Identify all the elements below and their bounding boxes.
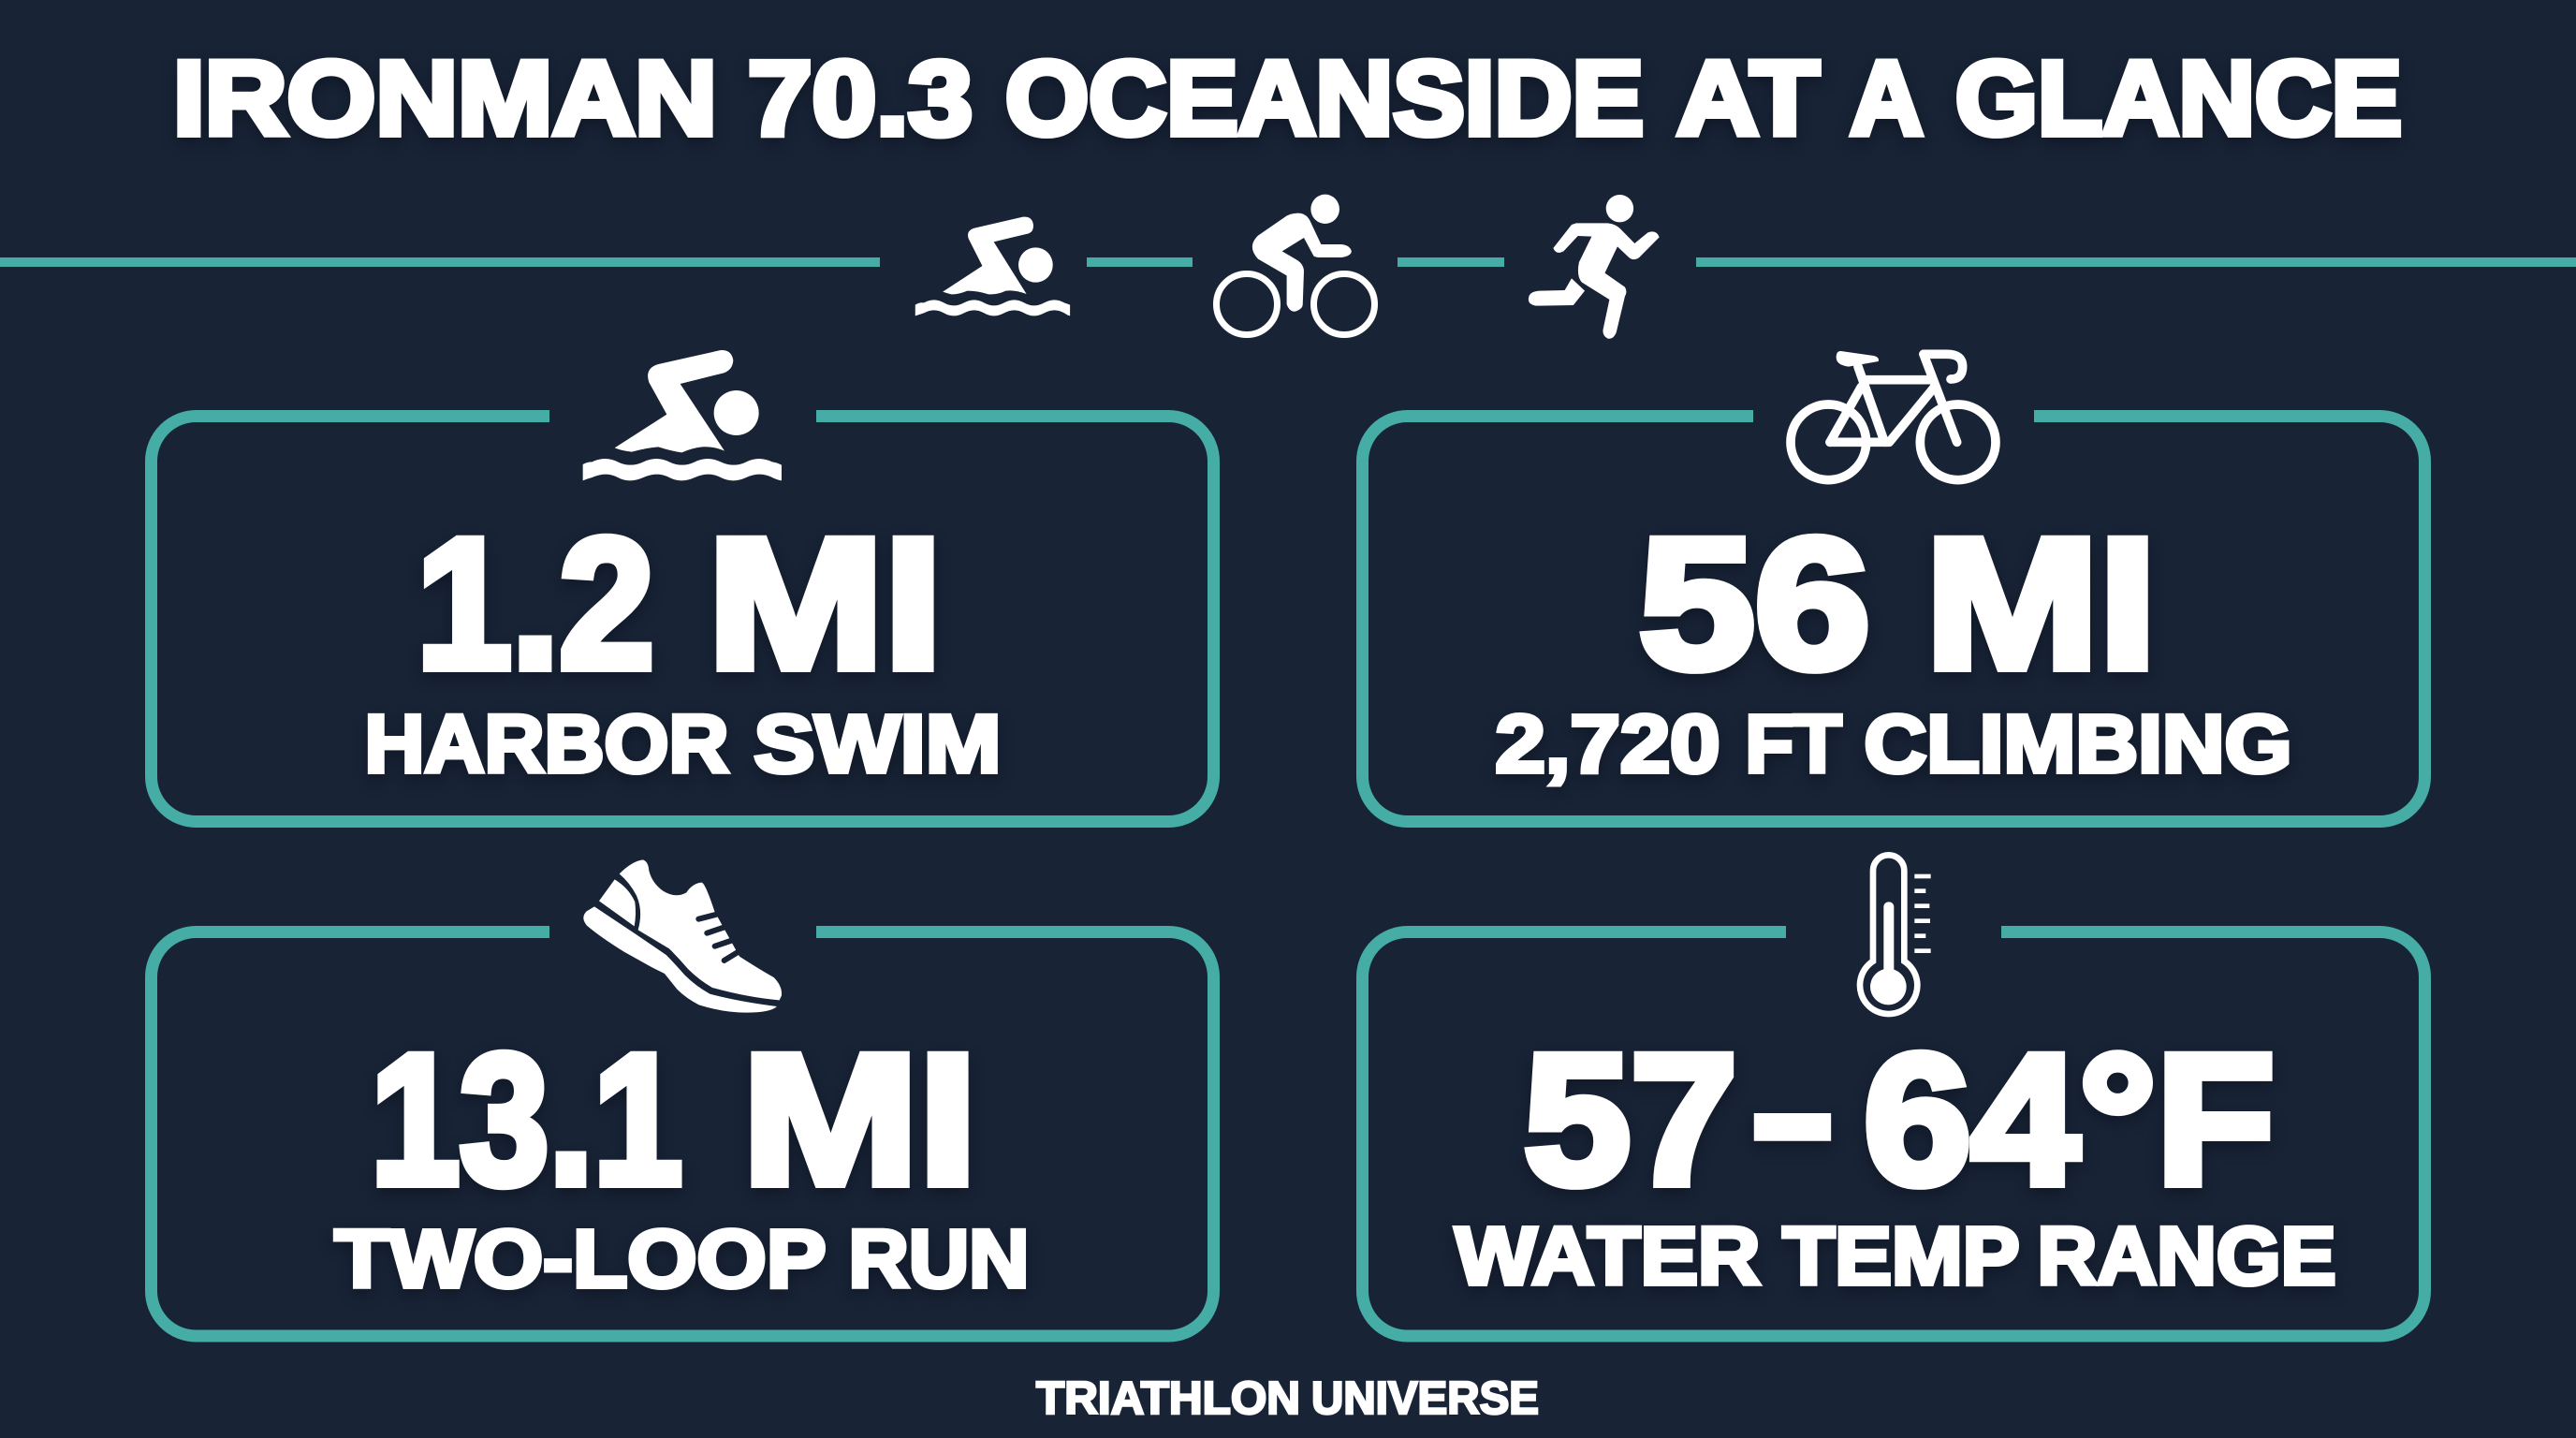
- label: harbor swim: HARBOR: [365, 698, 728, 790]
- stat: 56 MI: [1639, 500, 2157, 707]
- label: climbing: FT: [1745, 698, 1842, 790]
- card outline: temperature: [1363, 932, 2424, 1336]
- icon: small swimmer: [915, 217, 1070, 315]
- stat: 57–64°F: 64°F: [1864, 1016, 2275, 1223]
- panel: bike: [1363, 351, 2424, 822]
- footer brand: TRIATHLON: [1036, 1373, 1300, 1424]
- icon: small runner: [1529, 195, 1660, 339]
- label: climbing: CLIMBING: [1865, 698, 2291, 790]
- icon: thermometer: [1860, 855, 1931, 1014]
- icon: small cyclist: [1217, 195, 1374, 335]
- label: harbor swim: SWIM: [754, 698, 1002, 790]
- stat: 1.2 MI: [417, 500, 943, 707]
- panel: swim: [152, 350, 1213, 822]
- panel: run: [152, 859, 1213, 1336]
- label: two-loop run: [335, 1213, 1030, 1305]
- label: climbing: 2,720: [1496, 698, 1720, 790]
- icon: bicycle: [1791, 351, 1996, 480]
- label: water temp range: [1455, 1211, 2336, 1301]
- divider line with gaps for sport icons: [0, 257, 2576, 267]
- title: 70.3: [748, 39, 973, 157]
- label: water temp range: RANGE: [2037, 1211, 2336, 1301]
- label: two-loop run: RUN: [848, 1213, 1030, 1305]
- card outline: bike: [1363, 416, 2424, 822]
- title: A: [1850, 39, 1923, 157]
- stat: 1.2 MI: MI: [708, 500, 943, 707]
- footer brand: [1036, 1373, 1539, 1424]
- title: IRONMAN: [173, 39, 717, 157]
- panel: water temperature: [1363, 855, 2424, 1336]
- label: water temp range: WATER: [1455, 1211, 1760, 1301]
- title: [173, 39, 2402, 157]
- icon: swimmer: [583, 350, 782, 480]
- title: AT: [1677, 39, 1820, 157]
- stat: 1.2 MI: 1.2: [417, 500, 654, 707]
- label: two-loop run: TWO-LOOP: [335, 1213, 826, 1305]
- stat: 56 MI: MI: [1925, 500, 2157, 707]
- card outline: swim: [152, 416, 1213, 822]
- card outline: run: [152, 932, 1213, 1336]
- stat: 57–64°F: 57: [1524, 1016, 1737, 1223]
- label: water temp range: TEMP: [1782, 1211, 2020, 1301]
- label: climbing: [1496, 698, 2291, 790]
- stat: 13.1 MI: [371, 1016, 977, 1223]
- footer brand: UNIVERSE: [1311, 1373, 1539, 1424]
- stat: 57–64°F: [1524, 1009, 2275, 1223]
- title: GLANCE: [1955, 39, 2402, 157]
- label: harbor swim: [365, 698, 1002, 790]
- stat: 56 MI: 56: [1639, 500, 1870, 707]
- stat: 13.1 MI: MI: [742, 1016, 977, 1223]
- stat: 57–64°F: –: [1753, 1009, 1832, 1216]
- icon: running shoe: [583, 859, 782, 1013]
- title: OCEANSIDE: [1005, 39, 1644, 157]
- stat: 13.1 MI: 13.1: [371, 1016, 682, 1223]
